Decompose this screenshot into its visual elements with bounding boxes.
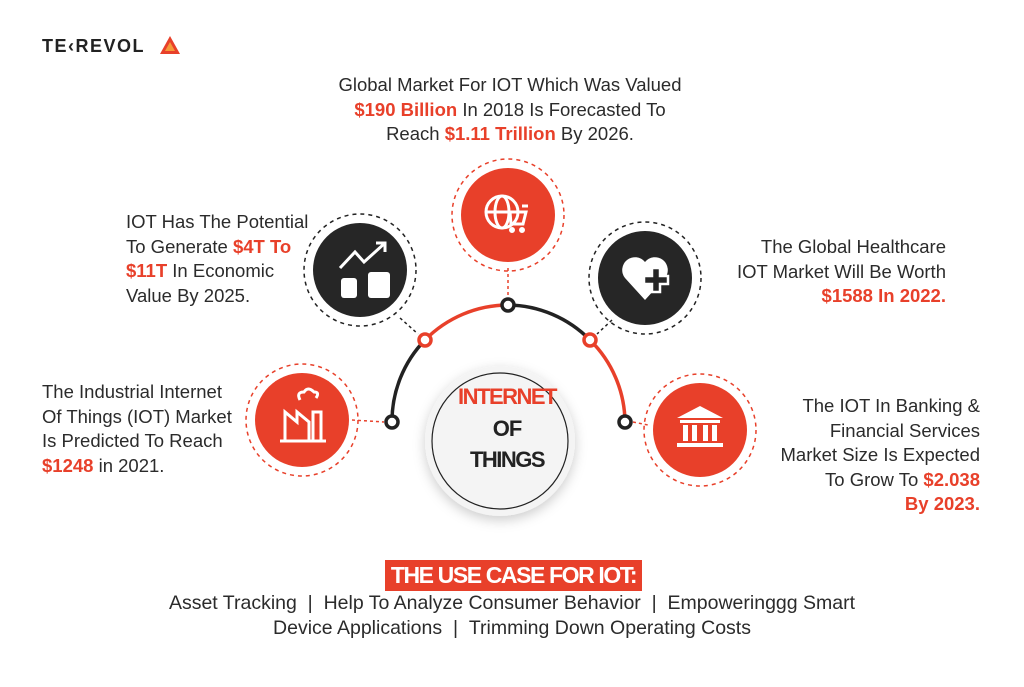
text: industrial: Is Predicted To Reach [42,430,223,451]
icon: factory [246,364,358,476]
nodes [386,299,631,428]
text: healthcare: $1588 In 2022. [822,285,946,306]
text: use cases: Asset Tracking | Help To Analyze Consumer Behavior | Empoweringgg Smart [169,592,855,614]
icon: top globe cart [452,159,564,271]
text: economic value: Value By 2025. [126,284,250,306]
text: global market [338,74,682,144]
text: banking [781,395,980,514]
connector dashes [352,268,648,425]
text: banking: Financial Services [830,420,980,440]
text: global market: $190 Billion In 2018 Is Forecasted To [354,98,666,120]
center circle: THINGS [470,447,545,472]
text: economic value: IOT Has The Potential [126,211,308,232]
icon: bank [644,374,756,486]
text: banking: By 2023. [905,493,980,514]
text: global market: Reach $1.11 Trillion By 2026. [386,123,634,144]
logo: TE‹REVOL [42,36,145,56]
text: banking: To Grow To $2.038 [825,468,980,490]
arc [392,305,625,422]
text: use cases [169,592,855,639]
text: healthcare: The Global Healthcare [761,236,946,257]
banner: use case: THE USE CASE FOR IOT: [391,562,636,588]
text: economic value: $11T In Economic [126,260,274,281]
center circle: OF [493,416,522,441]
center circle [425,366,575,516]
text: economic value: To Generate $4T To [126,236,291,256]
text: banking: Market Size Is Expected [781,444,980,465]
text: healthcare: IOT Market Will Be Worth [737,260,946,282]
text: industrial: The Industrial Internet [42,381,222,402]
text: banking: The IOT In Banking & [802,395,980,416]
text: healthcare [737,236,946,306]
text: global market: Global Market For IOT Which Was Valued [338,74,682,95]
text: use cases: Device Applications | Trimming Down Operating Costs [273,617,751,639]
icon: heart plus [589,222,701,334]
text: economic value [126,211,308,306]
text: industrial [42,381,232,476]
text: industrial: $1248 in 2021. [42,454,164,476]
text: industrial: Of Things (IOT) Market [42,406,232,426]
center circle: INTERNET [458,384,558,409]
icon: growth coins [304,214,416,326]
